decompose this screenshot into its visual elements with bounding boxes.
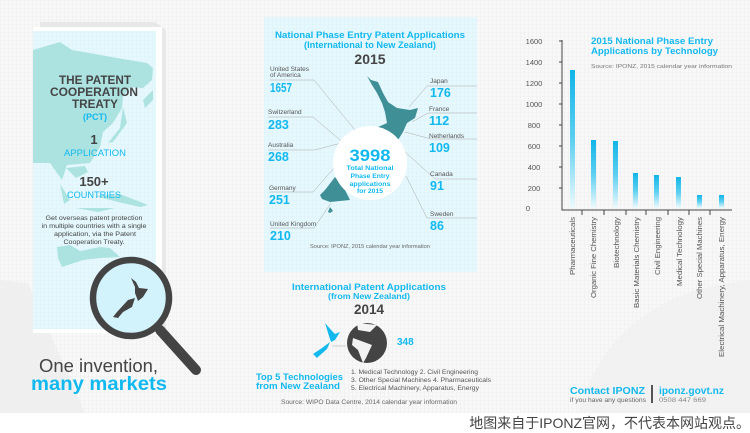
country stats: left: of America — [270, 72, 301, 79]
list: top 5 technologies: 5. Electrical Machinery, Apparatus, Energy — [351, 385, 480, 392]
stat: 1 application — [64, 132, 126, 159]
country stats: left: 1657 — [270, 81, 292, 95]
stat: 150+ countries: COUNTRIES — [67, 190, 121, 201]
axes — [559, 40, 732, 215]
arrow — [332, 345, 346, 347]
contact block — [570, 385, 724, 404]
category labels: Pharmaceuticals — [568, 217, 577, 275]
category labels: Civil Engineering — [653, 217, 662, 275]
country stats: left: Switzerland — [268, 109, 302, 116]
country stats: left: 283 — [268, 118, 289, 132]
treaty description: Get overseas patent protection — [46, 215, 143, 222]
callout: 3998 total: for 2015 — [357, 188, 383, 195]
country stats: left: 268 — [268, 150, 289, 164]
country stats: right: Sweden — [430, 211, 454, 218]
heading: treaty title: THE PATENT — [59, 73, 132, 87]
heading: national phase entry: 2015 — [354, 51, 386, 67]
heading: international patent applications: (from New Zealand) — [328, 291, 410, 301]
heading: one invention, many markets: many markets — [31, 374, 167, 395]
country stats: left: United States — [270, 66, 310, 73]
callout: 3998 total: applications — [350, 181, 391, 188]
country stats: right: 91 — [430, 179, 444, 193]
stat: 150+ countries: 150+ — [79, 174, 109, 189]
country stats: left: 210 — [270, 229, 291, 243]
callout: 3998 total — [333, 126, 407, 200]
icon: globe — [347, 323, 387, 363]
panel: patent cooperation treaty — [33, 22, 166, 333]
heading: treaty title: (PCT) — [83, 112, 107, 122]
axis labels: 1200 — [526, 79, 542, 88]
chart heading: Applications by Technology — [591, 46, 719, 57]
treaty description — [42, 215, 147, 246]
heading: one invention, many markets — [31, 355, 167, 395]
category labels: Other Special Machines — [695, 217, 704, 299]
callout: 3998 total: 3998 — [350, 146, 390, 165]
country stats: right: 109 — [429, 141, 450, 155]
map: Asia and Australia — [33, 42, 153, 287]
icon: magnifying glass over New Zealand — [93, 260, 196, 370]
category labels: Basic Materials Chemistry — [632, 217, 641, 308]
heading: one invention, many markets: One invention, — [39, 355, 158, 376]
treaty description: in multiple countries with a single — [42, 223, 147, 230]
stat: 150+ countries — [67, 174, 121, 201]
country stats: right: 86 — [430, 219, 444, 233]
category labels: Medical Technology — [675, 217, 684, 286]
heading: international patent applications — [292, 282, 446, 317]
list: top 5 technologies — [351, 369, 492, 392]
country stats: left: Germany — [269, 185, 296, 192]
country stats: right — [429, 78, 465, 233]
heading: national phase entry: (International to New Zealand) — [304, 40, 436, 50]
heading: treaty title — [50, 73, 138, 122]
caption: source notice: 地图来自于IPONZ官网，不代表本网站观点。 — [469, 415, 750, 431]
chart heading: 2015 National Phase Entry — [591, 36, 714, 47]
heading: national phase entry — [275, 30, 465, 67]
stat: 348: 348 — [397, 337, 414, 348]
country stats: right: Japan — [430, 78, 448, 85]
country stats: right: Canada — [430, 171, 453, 178]
country stats: right: France — [429, 106, 450, 113]
list: top 5 technologies: 1. Medical Technology 2. Civil Engineering — [351, 369, 478, 376]
heading: international patent applications: International Patent Applications — [292, 282, 446, 293]
heading: treaty title: TREATY — [72, 97, 118, 111]
heading: top 5 technologies — [256, 372, 343, 392]
callout: 3998 total: Phase Entry — [350, 173, 390, 180]
category labels: Organic Fine Chemistry — [589, 217, 598, 298]
chart heading — [591, 36, 719, 57]
axis labels: 1400 — [526, 58, 542, 67]
country stats: left: United Kingdom — [270, 221, 316, 228]
axis labels: 1600 — [526, 37, 542, 46]
heading: treaty title: COOPERATION — [50, 85, 138, 99]
axis labels — [526, 37, 542, 213]
heading: international patent applications: 2014 — [354, 302, 385, 317]
category labels: Biotechnology — [612, 217, 621, 268]
treaty description: Cooperation Treaty. — [64, 239, 125, 246]
contact block: iponz.govt.nz — [659, 386, 724, 397]
axis labels: 1000 — [526, 100, 542, 109]
bars — [570, 70, 724, 208]
bar chart: applications by technology — [526, 36, 732, 357]
category labels: Electrical Machinery, Apparatus, Energy — [717, 217, 726, 357]
country stats: left — [268, 66, 316, 243]
stat: 1 application: 1 — [90, 132, 98, 147]
axis labels: 200 — [528, 184, 540, 193]
contact block: 0508 447 669 — [659, 397, 706, 404]
country stats: left: Australia — [268, 142, 294, 149]
country stats: right: Netherlands — [429, 133, 465, 140]
country stats: right: 112 — [429, 114, 449, 128]
leader lines — [268, 80, 477, 228]
contact block: if you have any questions — [570, 398, 646, 404]
country stats: right: 176 — [430, 86, 451, 100]
panel: national phase entry — [264, 17, 477, 272]
source note: Source: IPONZ, 2015 calendar year information — [310, 244, 430, 250]
treaty description: application, via the Patent — [54, 231, 136, 238]
heading: national phase entry: National Phase Entry Patent Applications — [275, 30, 465, 41]
axis labels: 600 — [528, 142, 540, 151]
category labels — [568, 217, 726, 357]
axis labels: 400 — [528, 163, 540, 172]
map: New Zealand — [320, 76, 418, 213]
callout: 3998 total: Total National — [346, 165, 394, 172]
heading: top 5 technologies: from New Zealand — [256, 381, 340, 392]
source note: Source: WIPO Data Centre, 2014 calendar year information — [281, 399, 458, 406]
folded paper edge — [40, 22, 166, 333]
icon: New Zealand in blue — [313, 323, 340, 358]
stat: 1 application: APPLICATION — [64, 148, 126, 159]
axis labels: 800 — [528, 121, 540, 130]
contact block: Contact IPONZ — [570, 386, 645, 397]
axis labels: 0 — [526, 204, 530, 213]
country stats: left: 251 — [269, 193, 290, 207]
chart source: Source: IPONZ, 2015 calendar year information — [591, 64, 732, 70]
list: top 5 technologies: 3. Other Special Machines 4. Pharmaceuticals — [351, 377, 492, 384]
heading: top 5 technologies: Top 5 Technologies — [256, 372, 343, 383]
